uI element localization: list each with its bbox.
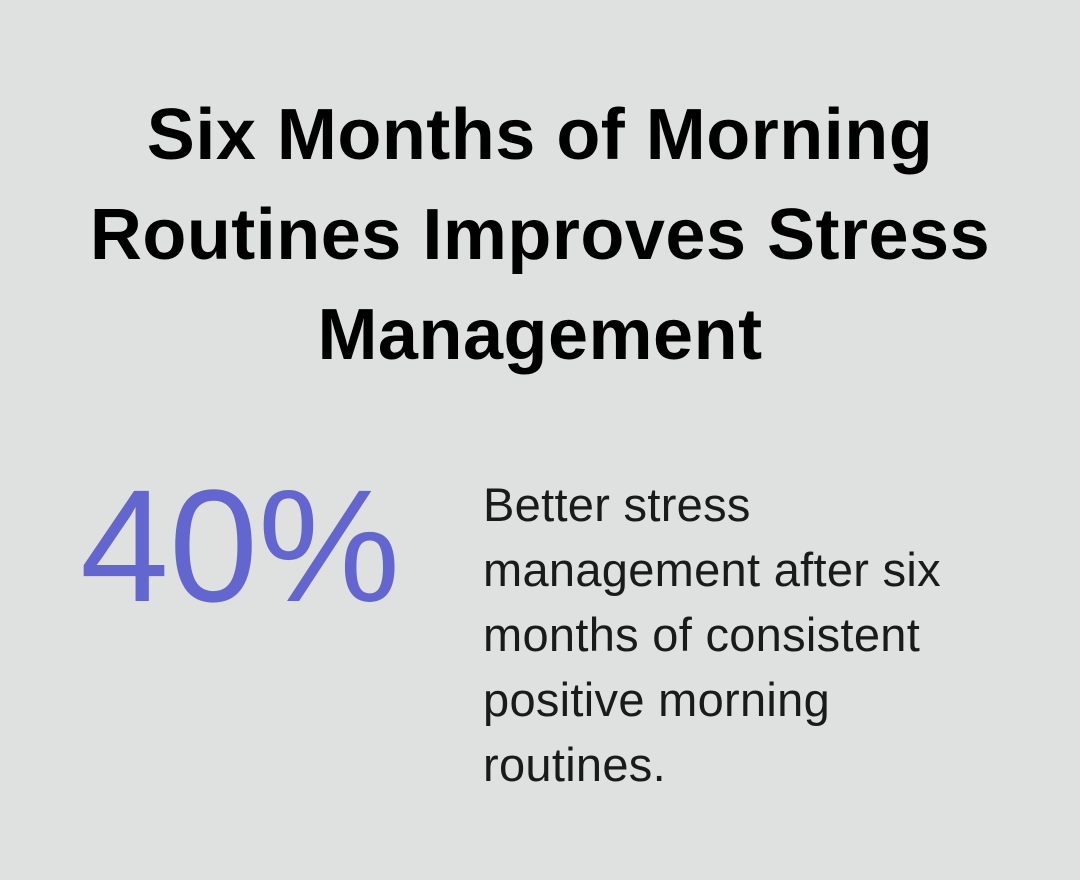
description text: [483, 478, 941, 791]
description text: months of consistent: [483, 608, 920, 661]
description text: positive morning: [483, 673, 830, 726]
title: Management: [317, 295, 763, 375]
title: Six Months of Morning: [147, 95, 933, 175]
title: Routines Improves Stress: [90, 195, 990, 275]
description text: routines.: [483, 738, 666, 791]
stat: 40%: 40%: [80, 456, 400, 635]
description text: Better stress: [483, 478, 751, 531]
description text: management after six: [483, 543, 941, 596]
title: [90, 95, 990, 375]
